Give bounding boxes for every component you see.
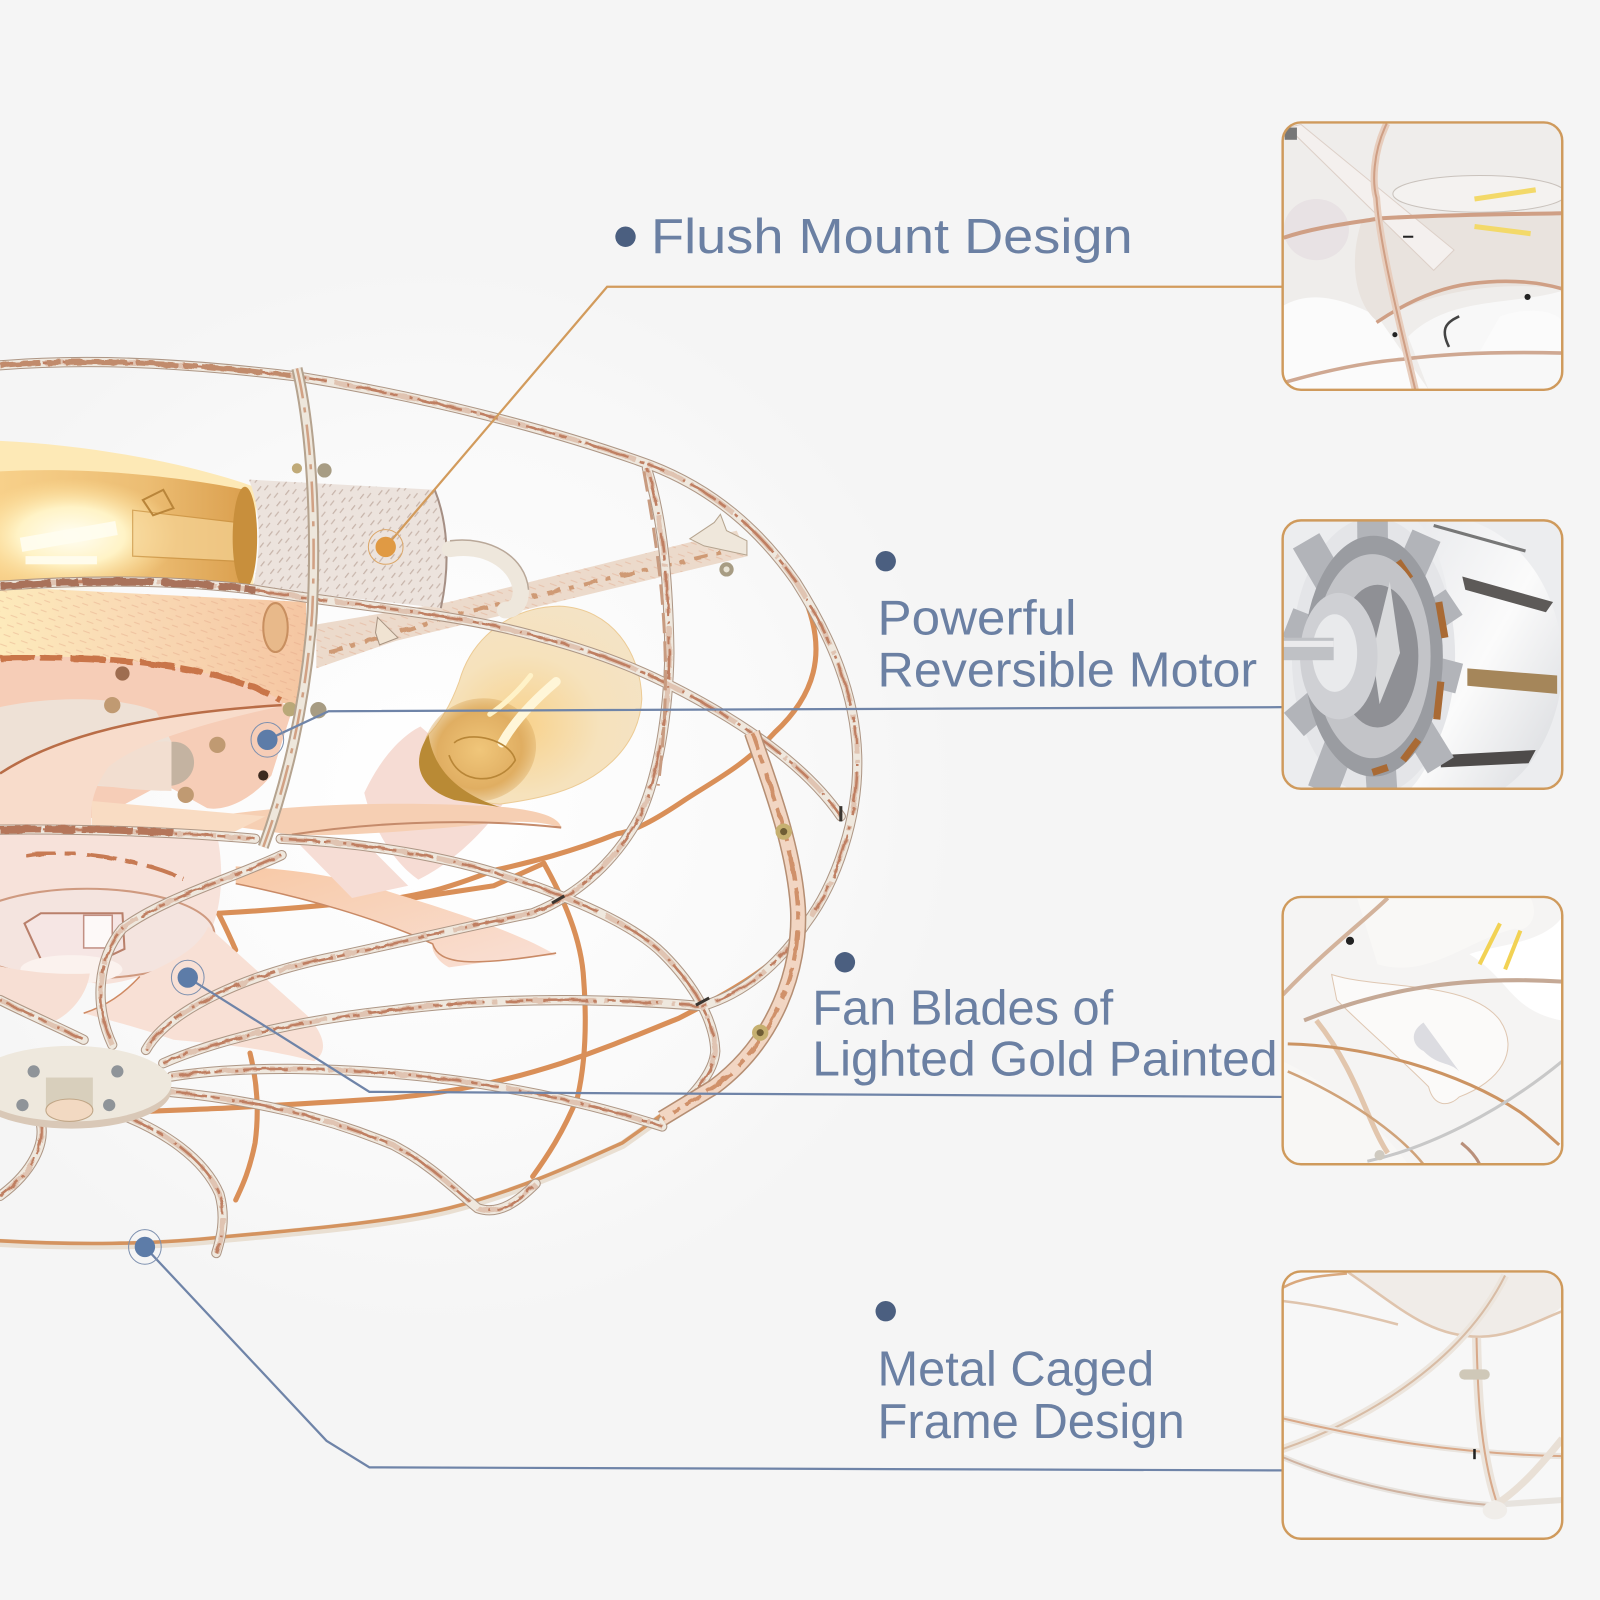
- cage wires: [0, 362, 857, 1253]
- lower right fan blade: [236, 841, 556, 967]
- left Edison bulb: [0, 441, 257, 593]
- callout line: motor: [251, 707, 1283, 757]
- label: Fan Blades of Lighted Gold Painted: [812, 952, 1278, 1087]
- label: Metal Caged Frame Design: [876, 1301, 1185, 1449]
- panel: metal frame detail: [1283, 1271, 1562, 1539]
- callout line: flush mount: [368, 287, 1283, 564]
- panel: flush mount detail: [1283, 122, 1566, 390]
- callout line: cage frame: [129, 1230, 1283, 1470]
- label: Metal Caged Frame Design: Frame Design: [878, 1395, 1185, 1449]
- label: Powerful Reversible Motor: [876, 551, 1257, 698]
- label: Metal Caged Frame Design: Metal Caged: [878, 1343, 1154, 1397]
- label: Fan Blades of Lighted Gold Painted: Fan Blades of: [812, 981, 1114, 1035]
- heavy rust on rings: [0, 362, 291, 833]
- motor bracket arm: [316, 514, 748, 668]
- bottom hub plate: [0, 1046, 171, 1129]
- label: Powerful Reversible Motor: Powerful: [878, 592, 1077, 646]
- callout line: fan blades: [171, 960, 1283, 1097]
- lamp socket with brushed finish: [249, 463, 447, 608]
- curled support strip: [450, 548, 521, 610]
- bottom copper rim: [0, 1112, 665, 1246]
- panel: fan blades detail: [1283, 897, 1562, 1168]
- body screws: [263, 603, 327, 718]
- label: Fan Blades of Lighted Gold Painted: Lighted Gold Painted: [812, 1033, 1278, 1087]
- right Edison bulb: [408, 606, 642, 817]
- right bulb socket: [364, 727, 505, 880]
- back cage wires: [0, 607, 816, 1200]
- flat cage bands: [263, 368, 841, 1118]
- label: Powerful Reversible Motor: Reversible Motor: [878, 644, 1257, 698]
- fan illustration: [0, 362, 857, 1253]
- fan blade behind right bulb: [191, 804, 561, 835]
- label: Flush Mount Design: Flush Mount Design: [651, 210, 1133, 264]
- panel: motor detail: [1283, 515, 1563, 801]
- ceiling canopy body: [0, 587, 306, 832]
- front-left fan blade: [0, 706, 282, 832]
- lower hub and gear: [0, 832, 221, 985]
- lower fan blades: [0, 927, 323, 1061]
